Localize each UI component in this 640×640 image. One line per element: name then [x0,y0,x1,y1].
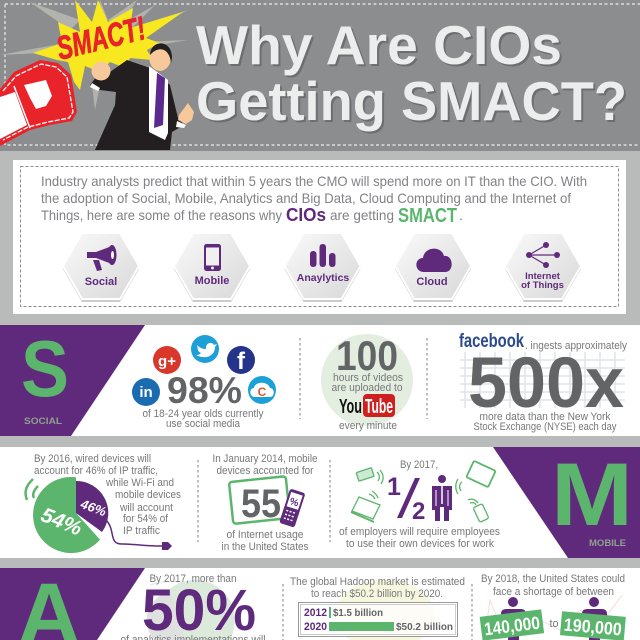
plaque: 190,000: 190,000 [563,615,623,639]
hexagon: Cloud [395,233,471,302]
talent shortage stat: face a shortage of between [493,586,614,598]
icon: person right [582,597,607,640]
bar chart: $1.5 billion [333,607,383,619]
icon: power cord [106,520,165,546]
data grid [460,352,625,408]
IP traffic text: will account [119,502,173,514]
intro text: the adoption of Social, Mobile, Analytics and Big Data, Cloud Computing and the Internet of [41,190,571,206]
bar chart: $50.2 billion [396,621,453,633]
icon: impact burst [0,0,188,110]
Hadoop stat [290,576,465,640]
one half [387,473,425,525]
YouTube stat: 100 [336,332,398,379]
pie chart: 54% [38,503,86,541]
Facebook stat: . ingests approximately [525,340,628,352]
title: Why Are CIOs [196,14,562,76]
icon: Google Plus: g+ [158,353,176,370]
section: Social [0,324,640,436]
one half: 2 [412,498,425,525]
icon: Facebook: f [237,348,246,375]
intro text [41,173,587,227]
half of employers stat [339,459,501,550]
title [196,14,629,134]
IP traffic text: while Wi-Fi and [105,477,174,489]
Facebook stat: Stock Exchange (NYSE) each day [474,421,617,433]
icon: cloud app [248,376,276,404]
IP traffic text [34,453,182,537]
title: Getting SMACT? [196,70,627,132]
purple banner M [493,444,640,558]
hexagon: Internet of Things [505,233,581,302]
hexagon: Social: Social [85,276,117,288]
hexagon: Internet of Things: of Things [521,280,564,291]
Facebook stat: more data than the New York [480,411,611,423]
Hadoop stat: The global Hadoop market is estimated [290,576,465,588]
Hadoop stat: to reach $50.2 billion by 2020. [311,588,443,600]
hexagon: Internet of Things: Internet [525,271,561,282]
YouTube stat: every minute [339,420,397,432]
icon: wifi arcs [26,479,38,500]
half of employers stat: to use their own devices for work [346,538,495,550]
icon: LinkedIn: in [139,384,153,401]
purple banner S: SOCIAL [24,416,62,427]
title: Why Are CIOs [198,16,564,78]
IP traffic text: IP traffic [123,525,161,537]
YouTube stat: are uploaded to [332,382,402,394]
YouTube logo: You [339,396,362,418]
header banner [0,0,640,151]
intro text: Industry analysts predict that within 5 years the CMO will spend more on IT than the CIO. With [41,173,587,189]
panel: introduction [13,160,626,314]
SMACT! label: SMACT! [53,9,149,67]
social media icons and 98% [132,335,276,430]
bar chart: 2012 [304,607,327,619]
Facebook stat: 500x [468,344,624,423]
talent shortage stat: By 2018, the United States could [481,573,625,585]
IP traffic text: mobile devices [115,489,182,501]
icon: Twitter [191,335,219,363]
businessman [90,43,194,150]
social media icons and 98%: of 18-24 year olds currently [142,408,264,420]
55% stat: In January 2014, mobile [212,453,318,465]
half of employers stat: of employers will require employees [339,526,501,538]
55% stat: 55 [241,482,281,526]
intro text: CIOs [286,205,326,225]
icon: LinkedIn [132,378,160,406]
55% stat: of Internet usage [226,529,304,541]
social media icons and 98%: use social media [166,418,240,430]
hexagon: Analytics [284,233,360,302]
icon: tablet [229,476,290,524]
intro text: SMACT [398,205,457,227]
Facebook stat: facebook [459,331,524,352]
title: Getting SMACT? [198,72,629,134]
icon: Facebook [227,346,255,375]
50% stat: By 2017, more than [150,573,236,585]
YouTube stat [321,332,413,432]
talent shortage stat [480,573,626,640]
one half: 1 [387,473,401,501]
purple banner S [0,324,145,436]
YouTube stat: hours of videos [333,372,404,384]
YouTube logo [339,394,395,418]
55% stat [212,453,318,553]
pie chart: 46% [78,496,109,519]
intro text: . [459,207,463,223]
hexagon: Social [63,233,139,302]
icon: person left [501,597,526,640]
intro text: are getting [330,207,394,223]
hexagon: Mobile: Mobile [195,275,229,287]
section: Mobile [0,444,640,558]
purple banner M: MOBILE [589,538,626,549]
IP traffic text: account for 46% of IP traffic, [34,465,158,477]
icon: phone: % [288,496,300,509]
stat: 98%: 98% [167,370,242,411]
55% stat: in the United States [222,541,309,553]
icon: Google Plus [153,346,181,374]
hexagon: Analytics: Anaylytics [297,272,349,284]
hexagon: Cloud: Cloud [416,276,448,288]
purple banner S: S [21,324,69,413]
YouTube logo: Tube [365,396,393,418]
section: Analytics [0,564,640,640]
icon: devices [351,461,496,522]
IP traffic text: By 2016, wired devices will [34,453,151,465]
purple banner A [0,564,145,640]
plaque: 140,000: 140,000 [483,613,541,639]
hexagon: Mobile [174,233,250,302]
icon: cloud app: C [258,385,267,399]
bar chart [298,602,458,636]
icon: employee [432,475,452,521]
pie chart [26,477,172,553]
intro text: Things, here are some of the reasons why [41,207,282,223]
purple banner M: M [551,444,633,544]
icon: boxing glove [0,60,77,146]
55% stat: devices accounted for [216,465,314,477]
bar chart: 2020 [304,621,327,633]
talent shortage stat: to [549,618,559,630]
half of employers stat: By 2017, [400,459,438,471]
IP traffic text: for 54% of [123,513,169,525]
